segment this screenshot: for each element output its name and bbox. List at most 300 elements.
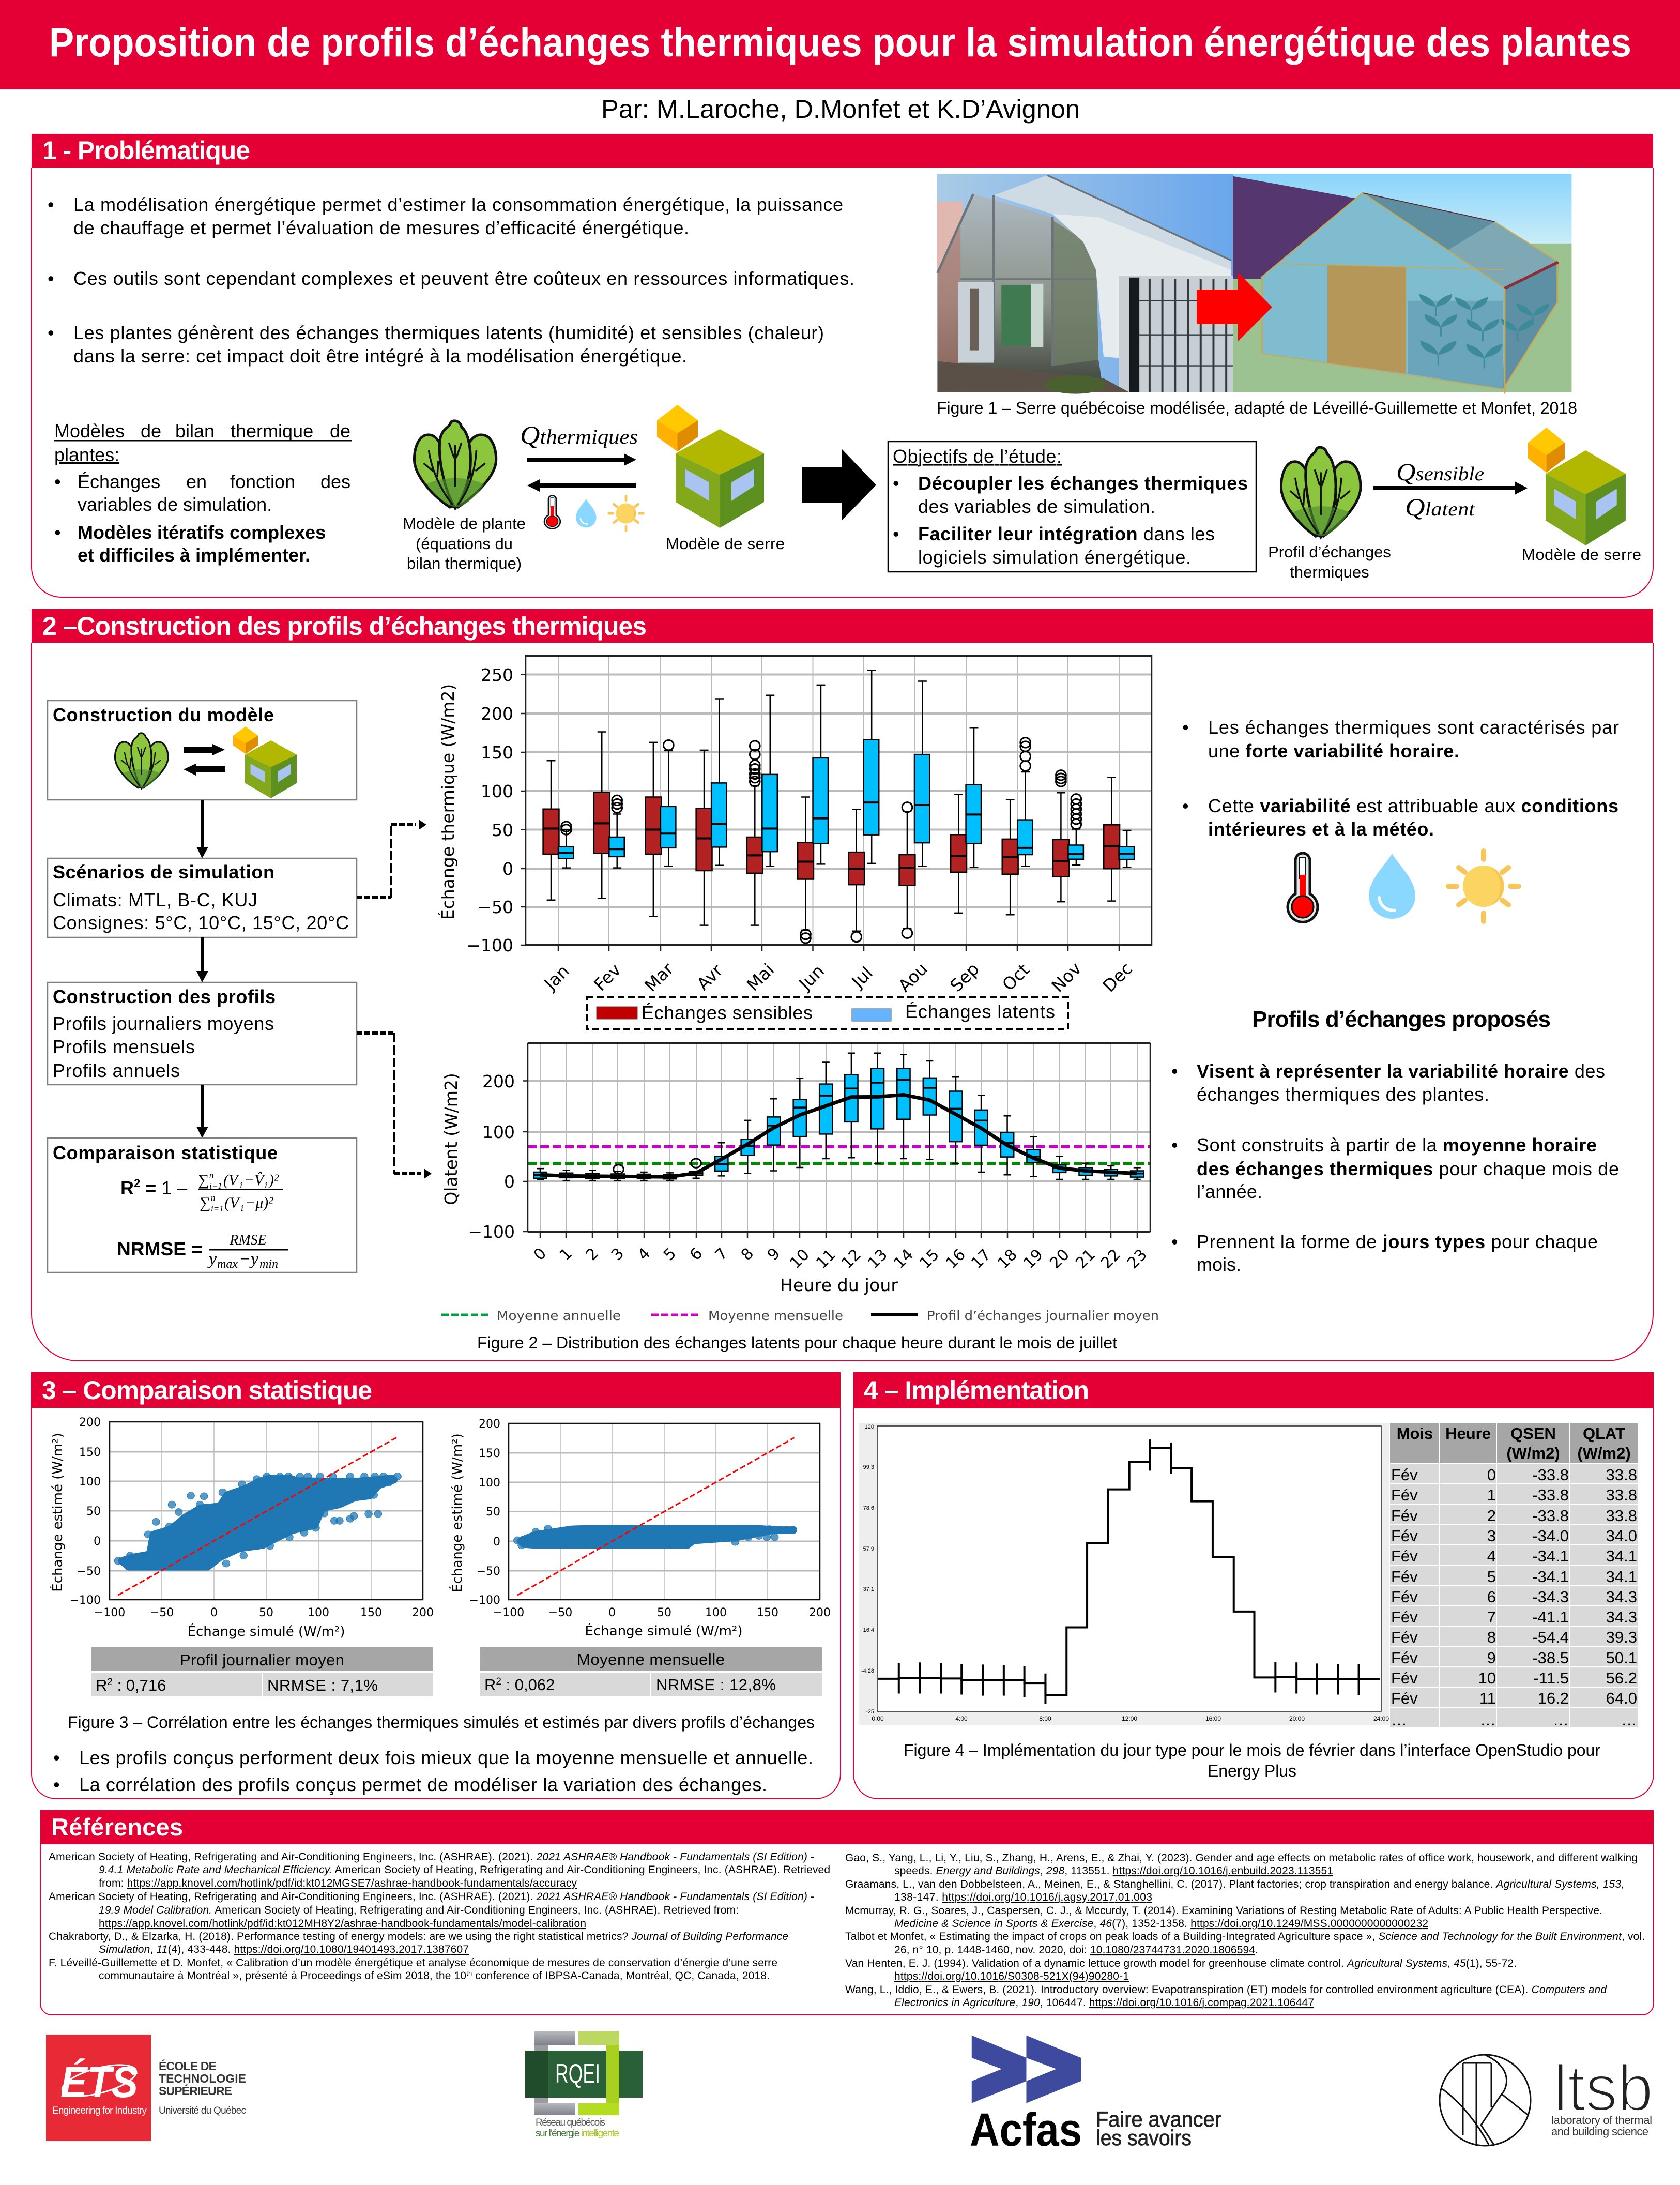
legend: chart 2 <box>441 1308 1159 1323</box>
chart: scatter profil journalier: 50 <box>259 1606 273 1619</box>
table: profil journalier moyen: NRMSE : 7,1% <box>267 1676 378 1694</box>
table: jour type février: Fév <box>1391 1649 1418 1667</box>
table: profil journalier moyen: Profil journalier moyen <box>180 1651 344 1669</box>
logo: ETS: SUPÉRIEURE <box>159 2084 232 2098</box>
chart: monthly box plots: 200 <box>481 704 513 724</box>
table: jour type février: 16.2 <box>1538 1689 1569 1707</box>
logo: ltsb: ltsb <box>1553 2052 1653 2125</box>
table: moyenne mensuelle: R <box>484 1676 496 1694</box>
table: jour type février: 34.0 <box>1606 1527 1637 1545</box>
arrow: flow 2 <box>196 937 208 982</box>
table: moyenne mensuelle <box>480 1647 822 1696</box>
chart: monthly box plots: Échange thermique (W/m2) <box>437 684 458 920</box>
table: jour type février: Mois <box>1397 1424 1433 1443</box>
table: profil journalier moyen: R <box>96 1676 107 1694</box>
formula: Q latent: Qlatent <box>1405 494 1476 521</box>
table: jour type février: 0 <box>1487 1466 1496 1484</box>
chart: hourly box plots july: 14 <box>890 1246 917 1272</box>
chart: schedule step: 4:00 <box>955 1715 968 1722</box>
caption: profil d'échanges: Profil d’échanges <box>1268 543 1391 561</box>
text: modèles de bilan thermique: et difficiles à implémenter. <box>78 544 310 566</box>
text: modèles de bilan thermique: bilan <box>175 420 215 442</box>
text: profils proposés: l’année. <box>1197 1181 1262 1202</box>
text: modèles de bilan thermique: variables de simulation. <box>78 494 272 515</box>
heading 3: 3 – Comparaison statistique <box>42 1376 372 1405</box>
text: variabilité: • <box>1182 717 1189 738</box>
chart: monthly box plots: Avr <box>693 960 727 994</box>
chart: scatter moyenne mensuelle: 200 <box>479 1418 500 1431</box>
chart: monthly box plots: 0 <box>502 859 513 879</box>
legend: chart 2: Moyenne mensuelle <box>708 1308 843 1323</box>
text: profils proposés: • <box>1171 1060 1178 1082</box>
references right column: Talbot et Monfet, « Estimating the impact of crops on peak loads of a Building-Integrated Agriculture space », Science and Technology for the Built Environment, vol. <box>845 1931 1645 1943</box>
table: jour type février: (W/m2) <box>1506 1444 1560 1462</box>
icon: greenhouse cube <box>676 429 764 528</box>
chart: monthly box plots: 250 <box>481 665 513 685</box>
text: variabilité: une forte variabilité horaire. <box>1208 740 1459 762</box>
table: jour type février: 3 <box>1487 1527 1496 1545</box>
chart: scatter moyenne mensuelle: −50 <box>477 1565 500 1578</box>
icon: small cube <box>657 405 698 451</box>
references left column: F. Léveillé-Guillemette et D. Monfet, « Calibration d’un modèle énergétique et analyse économique de mesures de conservation d’énergie d’une serre <box>49 1957 777 1969</box>
icon: sun small <box>609 496 643 530</box>
chart: scatter profil journalier: 200 <box>79 1416 101 1429</box>
text: profils proposés: mois. <box>1197 1254 1241 1275</box>
chart: hourly box plots july: 6 <box>686 1245 706 1264</box>
table: jour type février: -34.1 <box>1532 1568 1569 1586</box>
logo: RQEI: Réseau québécois <box>536 2117 605 2128</box>
table: moyenne mensuelle: Moyenne mensuelle <box>577 1650 725 1668</box>
table: jour type février: 1 <box>1487 1486 1496 1504</box>
chart: hourly box plots july: 4 <box>634 1245 654 1264</box>
chart: scatter moyenne mensuelle: −100 <box>493 1606 524 1619</box>
formula: R2: − <box>244 1172 254 1189</box>
table: jour type février: 34.3 <box>1606 1588 1637 1606</box>
chart: hourly box plots july: 5 <box>660 1245 680 1264</box>
heading 1: 1 - Problématique <box>42 136 250 165</box>
heading 4: 4 – Implémentation <box>864 1376 1089 1405</box>
table: moyenne mensuelle: : 0,062 <box>501 1676 555 1694</box>
icon: thermometer <box>1288 853 1318 922</box>
chart: scatter profil journalier: 0 <box>94 1535 101 1548</box>
chart: monthly box plots: 50 <box>492 820 513 840</box>
chart: scatter moyenne mensuelle: 100 <box>705 1606 727 1619</box>
chart: hourly box plots july: 18 <box>994 1246 1021 1272</box>
caption: modèle de plante: bilan thermique) <box>407 554 522 572</box>
chart: scatter profil journalier: 100 <box>308 1606 329 1619</box>
table: jour type février: -11.5 <box>1534 1669 1569 1687</box>
caption: modèle de serre 2: Modèle de serre <box>1522 545 1641 564</box>
text: modèles de bilan thermique: en <box>186 471 207 492</box>
references right column: speeds. Energy and Buildings, 298, 113551. https://doi.org/10.1016/j.enbuild.2023.113551 <box>894 1865 1333 1877</box>
table: jour type février: 7 <box>1487 1608 1496 1626</box>
icon: sun <box>1448 851 1519 921</box>
bullets problématique: • <box>48 322 54 343</box>
chart: hourly box plots july: 13 <box>864 1246 891 1272</box>
caption: figure 4: Figure 4 – Implémentation du jour type pour le mois de février dans l’interface OpenStudio pour <box>904 1741 1600 1759</box>
chart: hourly box plots july: 0 <box>504 1172 515 1192</box>
box: objectifs de l'étude: • <box>893 523 899 544</box>
table: jour type février: -33.8 <box>1532 1466 1569 1484</box>
chart: schedule step: 120 <box>865 1424 874 1430</box>
logo: ETS <box>46 2035 246 2141</box>
chart: scatter moyenne mensuelle: 150 <box>757 1606 778 1619</box>
legend: chart 2: Profil d’échanges journalier moyen <box>927 1308 1159 1323</box>
references left column: https://app.knovel.com/hotlink/pdf/id:kt012MH8Y2/ashrae-handbook-fundamentals/model-calibration <box>99 1918 586 1930</box>
box: objectifs de l'étude: logiciels simulation énergétique. <box>918 547 1191 568</box>
chart: monthly box plots: Sep <box>946 959 983 996</box>
arrows: thermal exchange <box>527 453 636 492</box>
chart: scatter profil journalier: 100 <box>79 1476 101 1489</box>
table: jour type février: … <box>1621 1711 1637 1729</box>
chart: scatter moyenne mensuelle: −100 <box>469 1594 500 1607</box>
caption: figure 1: Figure 1 – Serre québécoise modélisée, adapté de Léveillé-Guillemette et Monfet, 2018 <box>937 399 1577 417</box>
chart: scatter moyenne mensuelle <box>449 1418 831 1639</box>
references left column: 19.9 Model Calibration. American Society of Heating, Refrigerating and Air-Conditioning Engineers, Inc. (ASHRAE). Retrieved from: <box>99 1904 739 1916</box>
chart: scatter moyenne mensuelle: 50 <box>657 1606 671 1619</box>
caption: figure 4: Energy Plus <box>1208 1762 1296 1780</box>
chart: hourly box plots july: Qlatent (W/m2) <box>441 1073 461 1205</box>
formula: R2: −μ)² <box>245 1194 273 1211</box>
icon: drop small <box>576 499 597 527</box>
formula: R2: (V <box>224 1194 241 1211</box>
formula: R2: ∑ <box>200 1194 210 1211</box>
icon: lettuce <box>415 421 496 508</box>
chart: scatter profil journalier: 50 <box>86 1505 101 1518</box>
formula: R2 <box>120 1170 283 1213</box>
arrow: dashed to chart 1 <box>357 820 426 898</box>
references right column: Graamans, L., van den Dobbelsteen, A., Meinen, E., & Stanghellini, C. (2017). Plant factories; crop transpiration and energy balance. Agricultural Systems, 153, <box>845 1878 1624 1890</box>
heading: références: Références <box>51 1813 183 1841</box>
table: jour type février: 39.3 <box>1606 1628 1637 1646</box>
chart: monthly box plots: 100 <box>481 781 513 801</box>
table: jour type février: Heure <box>1445 1424 1491 1443</box>
logo: Acfas: les savoirs <box>1096 2126 1192 2150</box>
text: conclusions comparaison: La corrélation des profils conçus permet de modéliser la variation des échanges. <box>79 1774 767 1795</box>
chart: scatter profil journalier: −50 <box>150 1606 174 1619</box>
table: jour type février: -34.0 <box>1532 1527 1569 1545</box>
chart: schedule step: -25 <box>866 1709 874 1715</box>
chart: scatter moyenne mensuelle: 50 <box>486 1506 500 1519</box>
chart: scatter profil journalier <box>49 1416 434 1640</box>
text: modèles de bilan thermique: de <box>141 420 161 442</box>
chart: hourly box plots july: 11 <box>813 1246 839 1272</box>
references left column: American Society of Heating, Refrigerating and Air-Conditioning Engineers, Inc. (ASHRAE). (2021). 2021 ASHRAE® Handbook - Fundamentals (SI Edition) - <box>49 1851 814 1863</box>
bullets problématique <box>48 194 854 367</box>
text: variabilité: • <box>1182 795 1189 816</box>
icon: lettuce 2 <box>1281 447 1361 537</box>
text: conclusions comparaison: Les profils conçus performent deux fois mieux que la moyenne mensuelle et annuelle. <box>79 1747 813 1768</box>
box: objectifs de l'étude: Découpler les échanges thermiques <box>918 473 1248 494</box>
formula: R2: n <box>211 1193 215 1203</box>
figure 1: photo and model <box>937 174 1571 394</box>
table: profil journalier moyen <box>91 1647 433 1696</box>
references right column: Mcmurray, R. G., Soares, J., Caspersen, C. J., & Mccurdy, T. (2014). Examining Variations of Resting Metabolic Rate of Adults: A Public Health Perspective. <box>845 1905 1602 1917</box>
chart: monthly box plots: Jul <box>847 963 877 992</box>
table: jour type février: -34.1 <box>1532 1547 1569 1565</box>
box: objectifs de l'étude: Faciliter leur intégration dans les <box>918 523 1215 544</box>
text: profils proposés: Sont construits à partir de la moyenne horaire <box>1197 1134 1597 1156</box>
logo: ETS: TECHNOLOGIE <box>159 2072 246 2085</box>
box: objectifs de l'étude: Objectifs de l’étude: <box>893 446 1062 467</box>
icon: thermometer small <box>544 495 560 528</box>
flow box: construction des profils <box>48 982 357 1085</box>
table: jour type février: -33.8 <box>1532 1507 1569 1525</box>
formula: R2: i <box>241 1203 243 1213</box>
chart: monthly box plots: Nov <box>1047 958 1086 996</box>
caption: figure 2: Figure 2 – Distribution des échanges latents pour chaque heure durant le mois de juillet <box>477 1333 1117 1352</box>
chart: hourly box plots july: 2 <box>583 1245 602 1264</box>
formula: NRMSE: −y <box>239 1250 259 1269</box>
logo: ltsb: laboratory of thermal <box>1551 2114 1652 2127</box>
formula: R2: = <box>140 1177 156 1198</box>
text: profils proposés: Visent à représenter la variabilité horaire des <box>1197 1060 1605 1082</box>
arrow: flow 3 <box>196 1085 208 1138</box>
logo: ETS: ÉTS <box>60 2058 138 2106</box>
chart: monthly box plots: Mar <box>640 959 678 996</box>
flow box: construction des profils: Profils journaliers moyens <box>53 1013 274 1034</box>
table: jour type février: 2 <box>1487 1507 1496 1525</box>
formula: NRMSE: max <box>217 1257 238 1271</box>
formula: NRMSE: y <box>207 1250 217 1269</box>
text: modèles de bilan thermique: Modèles <box>54 420 125 442</box>
table: jour type février: … <box>1480 1711 1496 1729</box>
chart: monthly box plots: Mai <box>743 960 778 995</box>
table: jour type février: 5 <box>1487 1568 1496 1586</box>
chart: hourly box plots july: 19 <box>1020 1246 1047 1272</box>
logo: RQEI <box>525 2031 643 2139</box>
flow box: scénarios: Scénarios de simulation <box>53 861 274 883</box>
chart: hourly box plots july <box>441 1043 1151 1295</box>
table: jour type février: 34.1 <box>1606 1547 1637 1565</box>
table: jour type février <box>1390 1423 1638 1729</box>
chart: scatter profil journalier: Échange simulé (W/m²) <box>188 1623 345 1640</box>
table: jour type février: 64.0 <box>1606 1689 1637 1707</box>
arrow: red <box>1197 272 1272 341</box>
formula: Q sensible: Qsensible <box>1396 459 1484 486</box>
table: jour type février: 11 <box>1479 1689 1496 1707</box>
arrow: big black <box>802 449 876 520</box>
chart: hourly box plots july: 3 <box>608 1245 628 1264</box>
chart: hourly box plots july: 23 <box>1124 1246 1151 1272</box>
caption: modèle de plante: (équations du <box>416 535 513 553</box>
table: jour type février: -54.4 <box>1532 1628 1569 1646</box>
bullets problématique: de chauffage et permet l’évaluation de mesures d’efficacité énergétique. <box>73 217 689 238</box>
table: jour type février: Fév <box>1391 1628 1418 1646</box>
text: modèles de bilan thermique: Échanges <box>78 471 160 492</box>
flow box: comparaison statistique <box>48 1138 357 1272</box>
chart: scatter profil journalier: 200 <box>412 1606 434 1619</box>
logo: RQEI: sur l’énergie intelligente <box>536 2128 619 2139</box>
formula: R2: (V <box>223 1172 240 1189</box>
panel: 1 Problématique <box>32 134 1653 597</box>
chart: scatter profil journalier: −100 <box>70 1594 101 1607</box>
table: jour type février: 33.8 <box>1606 1466 1637 1484</box>
chart: scatter profil journalier: −50 <box>77 1565 101 1578</box>
text: modèles de bilan thermique <box>54 420 352 566</box>
text: variabilité: intérieures et à la météo. <box>1208 818 1434 840</box>
chart: hourly box plots july: 21 <box>1072 1246 1099 1272</box>
chart: schedule step: 99.3 <box>863 1464 874 1470</box>
chart: monthly box plots <box>437 656 1152 996</box>
formula: R2: )² <box>268 1172 279 1189</box>
chart: monthly box plots: −100 <box>466 935 513 955</box>
flow box: construction des profils: Profils annuels <box>53 1060 180 1081</box>
text: conclusions comparaison: • <box>53 1774 60 1795</box>
logo: Acfas: Acfas <box>970 2104 1082 2156</box>
references left column: conference of IBPSA-Canada, Montréal, QC, Canada, 2018. <box>472 1970 770 1982</box>
references right column: Gao, S., Yang, L., Li, Y., Liu, S., Zhang, H., Arens, E., & Zhai, Y. (2023). Gender and age effects on metabolic rates of office work, housework, and different walking <box>845 1852 1638 1864</box>
references right column: 26, n° 10, p. 1448-1460, nov. 2020, doi: 10.1080/23744731.2020.1806594. <box>894 1944 1258 1956</box>
text: conclusions comparaison <box>53 1747 813 1795</box>
bullets problématique: dans la serre: cet impact doit être intégré à la modélisation énergétique. <box>73 345 687 367</box>
chart: schedule step: 0:00 <box>872 1715 884 1722</box>
caption: modèle de plante: Modèle de plante <box>403 514 526 533</box>
flow box: construction du modèle: Construction du modèle <box>53 704 274 725</box>
chart: monthly box plots: Oct <box>998 960 1033 995</box>
table: jour type février: Fév <box>1391 1669 1418 1687</box>
heading 2: 2 –Construction des profils d’échanges thermiques <box>42 612 647 641</box>
references right column: Electronics in Agriculture, 190, 106447. https://doi.org/10.1016/j.compag.2021.106447 <box>894 1997 1314 2009</box>
logo: ltsb: and building science <box>1551 2125 1648 2138</box>
formula: NRMSE <box>117 1232 288 1271</box>
flow box: construction des profils: Profils mensuels <box>53 1036 195 1057</box>
table: jour type février: -33.8 <box>1532 1486 1569 1504</box>
references left column: American Society of Heating, Refrigerating and Air-Conditioning Engineers, Inc. (ASHRAE). (2021). 2021 ASHRAE® Handbook - Fundamentals (SI Edition) - <box>49 1891 814 1903</box>
table: jour type février: -34.3 <box>1532 1588 1569 1606</box>
chart: schedule step: 8:00 <box>1039 1715 1051 1722</box>
chart: monthly box plots: Jan <box>540 961 573 994</box>
table: jour type février: 56.2 <box>1606 1669 1637 1687</box>
flow box: scénarios <box>48 858 357 937</box>
text: profils proposés: • <box>1171 1231 1178 1252</box>
chart: monthly box plots: 150 <box>481 742 513 763</box>
text: modèles de bilan thermique: • <box>54 471 61 492</box>
formula: R2: 2 <box>134 1177 140 1190</box>
table: jour type février: Fév <box>1391 1486 1418 1504</box>
references right column: https://doi.org/10.1016/S0308-521X(94)90280-1 <box>894 1970 1129 1982</box>
chart: schedule step: 20:00 <box>1289 1715 1305 1722</box>
panel: Références <box>40 1810 1654 2015</box>
heading: profils proposés: Profils d’échanges proposés <box>1252 1007 1551 1032</box>
table: jour type février: Fév <box>1391 1608 1418 1626</box>
table: jour type février: QSEN <box>1510 1424 1556 1443</box>
references left column: Chakraborty, D., & Elzarka, H. (2018). Performance testing of energy models: are we using the right statistical metrics? Journal of Building Performance <box>49 1931 788 1943</box>
references left column: th <box>466 1969 472 1977</box>
chart: scatter moyenne mensuelle: −50 <box>548 1606 572 1619</box>
text: conclusions comparaison: • <box>53 1747 60 1768</box>
table: jour type février: Fév <box>1391 1547 1418 1565</box>
chart: scatter profil journalier: Échange estimé (W/m²) <box>49 1433 66 1592</box>
caption: figure 3: Figure 3 – Corrélation entre les échanges thermiques simulés et estimés par divers profils d’échanges <box>68 1713 815 1732</box>
chart: scatter moyenne mensuelle: 100 <box>479 1477 500 1490</box>
chart: hourly box plots july: 15 <box>916 1246 943 1272</box>
references right column: Van Henten, E. J. (1994). Validation of a dynamic lettuce growth model for greenhouse climate control. Agricultural Systems, 45(1), 55-72. <box>845 1958 1517 1969</box>
formula: R2: i <box>265 1180 267 1190</box>
flow box: scénarios: Climats: MTL, B-C, KUJ <box>53 889 257 911</box>
references left column: communautaire à Montréal », présenté à Proceedings of eSim 2018, the 10 <box>99 1970 466 1982</box>
caption: profil d'échanges <box>1268 543 1391 581</box>
text: modèles de bilan thermique: des <box>320 471 350 492</box>
text: modèles de bilan thermique: thermique <box>231 420 313 442</box>
text: profils proposés <box>1171 1060 1619 1275</box>
text: variabilité <box>1182 717 1619 840</box>
references left column: from: https://app.knovel.com/hotlink/pdf/id:kt012MGSE7/ashrae-handbook-fundamentals/accuracy <box>99 1877 577 1889</box>
chart: schedule step: 12:00 <box>1122 1715 1137 1722</box>
chart: hourly box plots july: 8 <box>738 1245 757 1264</box>
legend: chart 1 <box>587 997 1068 1029</box>
table: profil journalier moyen: : 0,716 <box>113 1676 166 1694</box>
table: jour type février: 4 <box>1487 1547 1496 1565</box>
caption: modèle de serre: Modèle de serre <box>666 535 785 553</box>
text: modèles de bilan thermique: de <box>330 420 350 442</box>
formula: R2: ∑ <box>198 1172 209 1189</box>
table: jour type février: 34.1 <box>1606 1568 1637 1586</box>
table: jour type février: -41.1 <box>1532 1608 1569 1626</box>
caption: modèle de plante <box>403 514 526 572</box>
chart: hourly box plots july: 200 <box>482 1071 515 1091</box>
logo: Acfas: Faire avancer <box>1096 2107 1221 2131</box>
table: jour type février: Fév <box>1391 1588 1418 1606</box>
references left column <box>49 1851 830 1982</box>
formula: NRMSE: min <box>259 1257 278 1271</box>
formula: NRMSE: NRMSE = <box>117 1238 203 1260</box>
chart: scatter profil journalier: 150 <box>360 1606 382 1619</box>
table: jour type février: QLAT <box>1583 1424 1625 1443</box>
chart: monthly box plots: Aou <box>894 959 931 996</box>
table: jour type février: 9 <box>1487 1649 1496 1667</box>
table: jour type février: 34.3 <box>1606 1608 1637 1626</box>
references left column: 9.4.1 Metabolic Rate and Mechanical Efficiency. American Society of Heating, Refrigerating and Air-Conditioning Engineers, Inc. (ASHRAE). Retrieved <box>99 1864 830 1876</box>
table: jour type février: 33.8 <box>1606 1507 1637 1525</box>
chart: hourly box plots july: 10 <box>786 1246 813 1272</box>
chart: scatter moyenne mensuelle: 0 <box>608 1606 616 1619</box>
caption: figure 4 <box>904 1741 1600 1780</box>
bullets problématique: Les plantes génèrent des échanges thermiques latents (humidité) et sensibles (chaleur) <box>73 322 824 343</box>
chart: hourly box plots july: 17 <box>968 1246 995 1272</box>
chart: hourly box plots july: −100 <box>468 1222 515 1242</box>
formula: NRMSE: RMSE <box>229 1232 267 1248</box>
logo: ETS: ÉCOLE DE <box>159 2059 217 2073</box>
chart: schedule step: 16:00 <box>1205 1715 1221 1722</box>
references right column: Medicine & Science in Sports & Exercise, 46(7), 1352-1358. https://doi.org/10.1249/MSS.0000000000000232 <box>894 1918 1428 1930</box>
box: objectifs de l'étude <box>888 442 1256 572</box>
references right column <box>845 1852 1645 2009</box>
panel: 3 Comparaison statistique <box>31 1372 841 1799</box>
chart: schedule step: 57.9 <box>863 1546 874 1552</box>
table: profil journalier moyen: 2 <box>107 1677 113 1688</box>
legend: chart 1: Échanges sensibles <box>642 1002 813 1023</box>
chart: monthly box plots: −50 <box>477 897 513 917</box>
formula: R2: 1 – <box>161 1177 187 1198</box>
chart: hourly box plots july: 22 <box>1097 1246 1124 1272</box>
chart: scatter profil journalier: 0 <box>210 1606 218 1619</box>
table: moyenne mensuelle: NRMSE : 12,8% <box>656 1676 776 1694</box>
table: jour type février: 8 <box>1487 1628 1496 1646</box>
text: modèles de bilan thermique: • <box>54 522 61 543</box>
logo: ETS: Engineering for Industry <box>52 2105 147 2116</box>
chart: scatter moyenne mensuelle: Échange estimé (W/m²) <box>449 1433 465 1592</box>
chart: scatter moyenne mensuelle: 150 <box>479 1447 500 1460</box>
table: jour type février: 6 <box>1487 1588 1496 1606</box>
text: variabilité: Cette variabilité est attribuable aux conditions <box>1208 795 1618 816</box>
formula: R2: n <box>209 1170 214 1180</box>
panel: 4 Implémentation <box>853 1372 1654 1799</box>
chart: schedule step: 37.1 <box>863 1586 874 1592</box>
formula: R2: V̂ <box>254 1172 266 1189</box>
chart: scatter moyenne mensuelle: Échange simulé (W/m²) <box>585 1622 742 1639</box>
table: jour type février: (W/m2) <box>1577 1444 1631 1462</box>
